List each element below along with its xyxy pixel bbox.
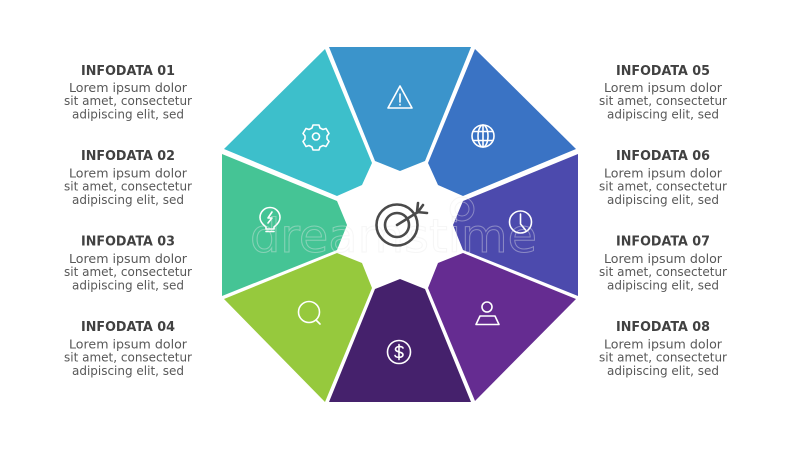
text: infodata 04: adipiscing elit, sed xyxy=(72,364,184,378)
text: infodata 04: sit amet, consectetur xyxy=(64,350,192,364)
text: infodata 01: INFODATA 01 xyxy=(81,64,175,79)
text: infodata 05: adipiscing elit, sed xyxy=(607,108,719,122)
text: infodata 03: Lorem ipsum dolor xyxy=(69,252,187,266)
segment: bottom dark purple xyxy=(329,279,471,402)
text: infodata 03: sit amet, consectetur xyxy=(64,265,192,279)
watermark: dreamstime xyxy=(250,209,537,263)
text: infodata 07: INFODATA 07 xyxy=(616,234,710,250)
icon: globe xyxy=(472,125,494,147)
text: infodata 07: Lorem ipsum dolor xyxy=(604,252,722,266)
text: infodata 03 xyxy=(64,234,192,292)
text: infodata 08: INFODATA 08 xyxy=(616,320,710,335)
text: infodata 05: Lorem ipsum dolor xyxy=(604,81,722,95)
text: infodata 02 xyxy=(64,149,192,207)
text: infodata 03: INFODATA 03 xyxy=(81,234,175,250)
text: infodata 06 xyxy=(599,149,727,207)
text: infodata 07: adipiscing elit, sed xyxy=(607,278,719,292)
segment: green xyxy=(222,154,347,296)
segment: indigo xyxy=(453,154,578,296)
icon: clock xyxy=(510,211,532,233)
text: infodata 08: Lorem ipsum dolor xyxy=(604,338,722,352)
text: infodata 06: Lorem ipsum dolor xyxy=(604,166,722,180)
text: infodata 01: sit amet, consectetur xyxy=(64,94,192,108)
icon: magnifier xyxy=(298,302,320,324)
segment: blue upper right xyxy=(428,49,576,196)
text: infodata 07: sit amet, consectetur xyxy=(599,265,727,279)
text: infodata 05: sit amet, consectetur xyxy=(599,94,727,108)
segment: top blue xyxy=(329,47,471,171)
text: infodata 01 xyxy=(64,64,192,122)
segment: teal xyxy=(224,49,372,196)
text: infodata 06: adipiscing elit, sed xyxy=(607,193,719,207)
text: infodata 02: sit amet, consectetur xyxy=(64,180,192,194)
text: infodata 02: INFODATA 02 xyxy=(81,149,175,164)
icon: gear xyxy=(303,125,329,150)
text: infodata 07 xyxy=(599,234,727,292)
text: infodata 08 xyxy=(599,320,727,378)
text: infodata 05 xyxy=(599,64,727,122)
icon: target xyxy=(376,203,427,246)
text: infodata 01: Lorem ipsum dolor xyxy=(69,81,187,95)
icon: light bulb xyxy=(260,208,280,232)
text: infodata 06: INFODATA 06 xyxy=(616,149,710,164)
text: infodata 03: adipiscing elit, sed xyxy=(72,278,184,292)
text: infodata 04 xyxy=(64,320,192,378)
segment: lime xyxy=(224,253,372,402)
text: infodata 02: Lorem ipsum dolor xyxy=(69,166,187,180)
text: infodata 08: sit amet, consectetur xyxy=(599,350,727,364)
segment: purple xyxy=(428,253,576,401)
text: infodata 05: INFODATA 05 xyxy=(616,64,710,79)
text: infodata 04: Lorem ipsum dolor xyxy=(69,338,187,352)
text: infodata 02: adipiscing elit, sed xyxy=(72,193,184,207)
text: infodata 04: INFODATA 04 xyxy=(81,320,175,335)
text: infodata 01: adipiscing elit, sed xyxy=(72,108,184,122)
text: infodata 08: adipiscing elit, sed xyxy=(607,364,719,378)
icon: dollar coin xyxy=(388,340,410,364)
icon: person xyxy=(476,302,499,324)
text: infodata 06: sit amet, consectetur xyxy=(599,180,727,194)
icon: warning triangle xyxy=(388,86,412,108)
